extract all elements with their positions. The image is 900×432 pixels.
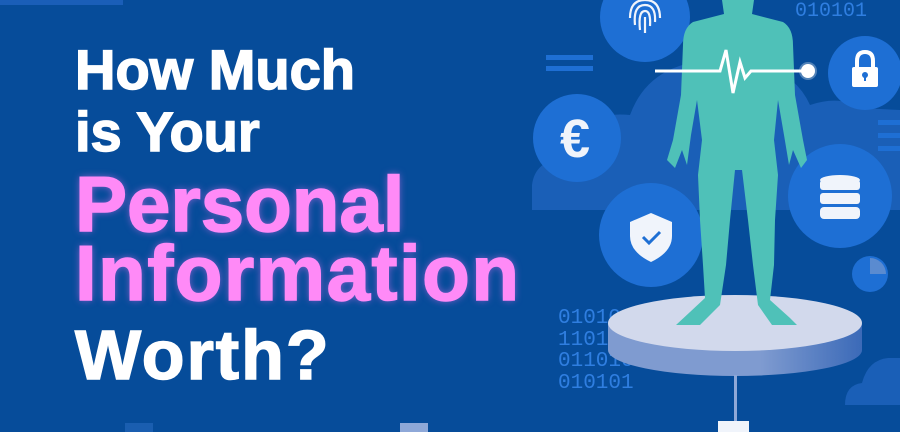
icon: euro: € (560, 109, 590, 169)
binary bottom left: 010101 (558, 372, 634, 395)
menu lines right (878, 120, 900, 151)
decorative top bar (0, 0, 123, 5)
binary top right: 010101 (795, 0, 867, 23)
icon: shield (599, 183, 703, 287)
icon: database (788, 144, 892, 248)
title: Personal (75, 160, 404, 248)
icon: lock (828, 36, 900, 110)
binary bottom left: 010101 (558, 307, 634, 330)
binary bottom left (558, 307, 634, 395)
binary bottom left: 110110 (558, 329, 634, 352)
title: Worth? (75, 316, 331, 394)
icon: pie (852, 256, 888, 292)
icon: euro (533, 94, 621, 182)
cloud background (532, 60, 900, 210)
title: Information (75, 229, 520, 317)
bottom tabs (125, 423, 428, 432)
binary bottom left: 011010 (558, 350, 634, 373)
heartbeat line (655, 50, 817, 93)
stem (718, 375, 749, 432)
human figure (667, 0, 807, 325)
icon: fingerprint (600, 0, 690, 62)
menu lines left (546, 55, 593, 71)
title (74, 38, 520, 394)
platform (608, 295, 862, 376)
title: How Much (75, 38, 355, 101)
cloud bottom right (845, 358, 900, 405)
title: is Your (75, 100, 260, 163)
